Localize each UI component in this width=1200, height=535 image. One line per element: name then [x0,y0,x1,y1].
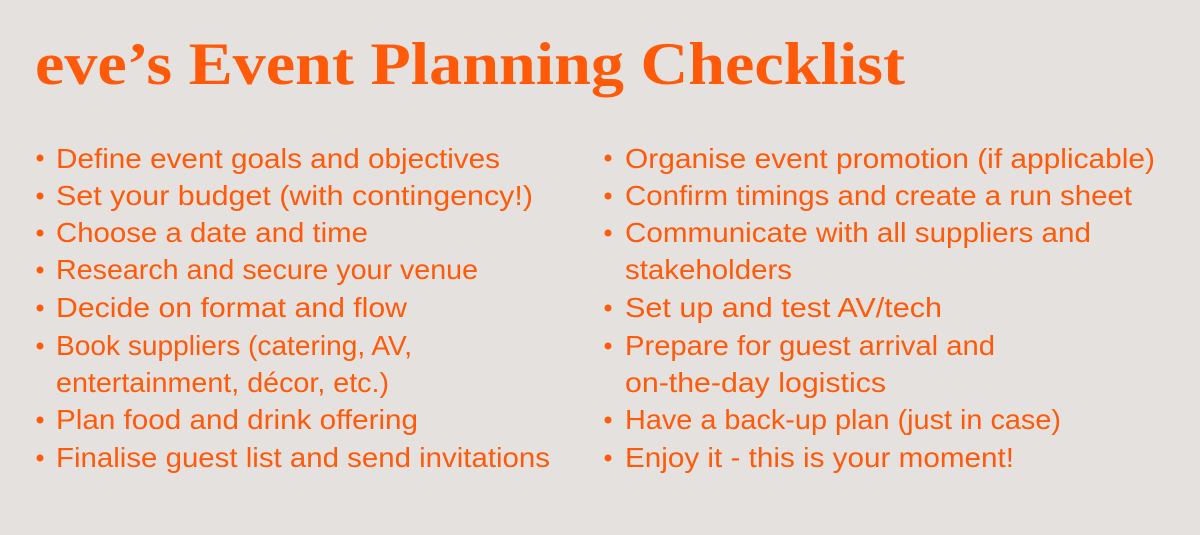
left checklist column [36,143,550,473]
item: timings: Confirm timings and create a run sheet [625,180,1132,211]
item: arrival: Prepare for guest arrival and [625,330,995,361]
item: suppliers: Book suppliers (catering, AV, [56,330,412,361]
item: communicate [604,217,1091,285]
item: suppliers: entertainment, décor, etc.) [56,367,389,398]
right checklist column [604,143,1155,473]
item: budget: Set your budget (with contingency!) [56,180,533,211]
item: arrival [604,330,995,398]
item: AV: Set up and test AV/tech [625,292,942,323]
item: backup: Have a back-up plan (just in case) [625,404,1061,435]
title: eve’s Event Planning Checklist [35,31,905,97]
item: promotion: Organise event promotion (if applicable) [625,143,1155,174]
item: food: Plan food and drink offering [56,404,418,435]
item: suppliers [36,330,412,398]
item: arrival: on-the-day logistics [625,367,886,398]
item: communicate: stakeholders [625,254,792,285]
item: enjoy: Enjoy it - this is your moment! [625,442,1014,473]
item: guests: Finalise guest list and send invitations [56,442,550,473]
item: venue: Research and secure your venue [56,254,478,285]
item: communicate: Communicate with all suppliers and [625,217,1091,248]
item: date: Choose a date and time [56,217,368,248]
item: goals: Define event goals and objectives [56,143,500,174]
item: format: Decide on format and flow [56,292,408,323]
